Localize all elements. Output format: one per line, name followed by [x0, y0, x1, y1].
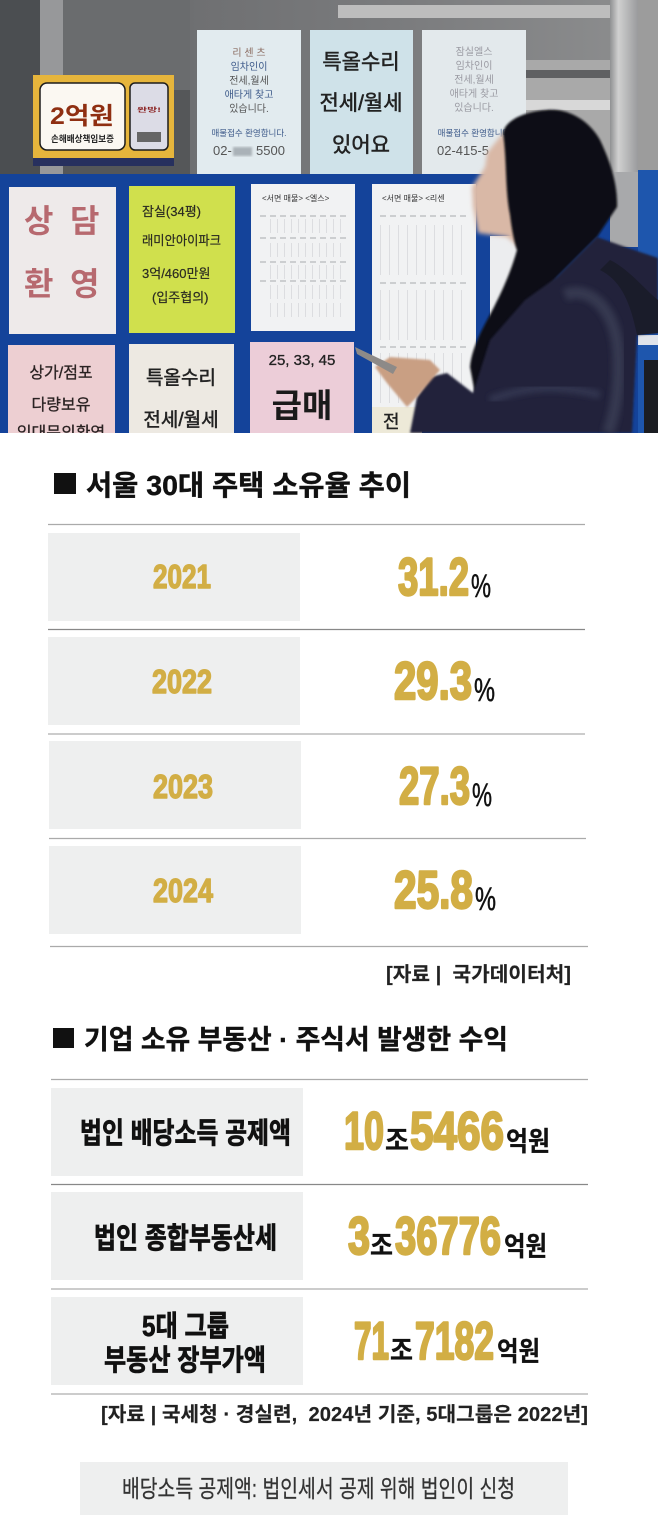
row: 2023: % — [472, 777, 492, 813]
poster: 특올수리 전세/월세 있어요: 전세/월세 — [319, 92, 403, 115]
poster: 잠실엘스 notice: 매물접수 환영합니다 — [438, 128, 511, 138]
row: 2024: 25.8 — [394, 861, 473, 920]
woman figure — [355, 110, 658, 433]
poster: 잠실 listing: 잠실(34평) — [142, 204, 201, 219]
table: Seoul 30s home ownership — [48, 524, 588, 946]
poster: 상가/점포: 임대문의환영 — [17, 424, 105, 442]
source: 국가데이터처: [자료 | 국가데이터처] — [386, 963, 571, 986]
row: 2021 — [48, 533, 491, 621]
hair — [470, 110, 617, 420]
sign: 2억원 guarantee card: 2억원 — [50, 103, 114, 130]
row: 법인 배당소득 공제액 — [51, 1088, 550, 1176]
poster: 리센츠 notice: 02- — [213, 143, 232, 158]
row: 2022: 29.3 — [394, 652, 472, 711]
poster: 잠실엘스 notice: 임차인이 — [456, 59, 492, 72]
sign: 2억원 guarantee card — [33, 75, 174, 166]
poster: 상담 환영 — [9, 187, 116, 334]
poster: 잠실엘스 notice — [422, 30, 526, 174]
row: 2021: % — [471, 568, 491, 604]
row: 5대 그룹 부동산 장부가액: 조 — [390, 1336, 413, 1366]
poster: 리센츠 notice: 리 센 츠 — [232, 47, 266, 59]
sign: 2억원 guarantee card: 손해배상책임보증 — [51, 133, 114, 144]
poster: 잠실엘스 notice: 전세,월세 — [454, 74, 494, 86]
poster: 잠실 listing: 래미안아이파크 — [142, 233, 221, 248]
poster: 리센츠 notice: 임차인이 — [231, 60, 267, 73]
row: 법인 배당소득 공제액: 5466 — [410, 1102, 504, 1161]
row: 법인 종합부동산세: 법인 종합부동산세 — [94, 1222, 277, 1255]
footnote box — [80, 1462, 568, 1515]
row: 2021: 2021 — [153, 558, 211, 595]
poster: 리센츠 notice: 있습니다. — [229, 103, 269, 115]
row: 법인 종합부동산세: 억원 — [504, 1232, 547, 1262]
poster: 특올수리 전세/월세 있어요 — [310, 30, 413, 174]
jacket — [410, 237, 658, 433]
row: 2022 — [48, 637, 495, 725]
row: 법인 배당소득 공제액: 10 — [344, 1102, 384, 1161]
heading: 기업 소유 부동산·주식서 발생한 수익: 기업 소유 부동산 · 주식서 발생한 수익 — [84, 1025, 508, 1055]
photo: woman looking at real-estate office window — [0, 0, 658, 442]
row: 2024 — [49, 846, 496, 934]
row: 법인 종합부동산세: 조 — [370, 1231, 393, 1261]
poster: 특올수리 전세/월세: 특올수리 — [146, 367, 216, 389]
row: 법인 배당소득 공제액: 억원 — [506, 1127, 550, 1157]
table: corporate real estate and stock gains — [51, 1080, 588, 1394]
poster: price table 2 — [372, 184, 476, 433]
poster: 잠실엘스 notice: 있습니다. — [454, 102, 494, 114]
row: 법인 종합부동산세: 36776 — [395, 1207, 501, 1266]
row: 2022: 2022 — [152, 663, 212, 700]
poster: 상가/점포: 다량보유 — [32, 396, 90, 414]
row: 5대 그룹 부동산 장부가액: 억원 — [497, 1337, 540, 1367]
poster: 리센츠 notice: 5500 — [256, 143, 285, 158]
poster: 리센츠 notice: 전세,월세 — [229, 75, 269, 87]
poster: 특올수리 전세/월세 있어요: 있어요 — [332, 134, 390, 157]
poster: 리센츠 notice — [197, 30, 301, 174]
row: 5대 그룹 부동산 장부가액 — [51, 1297, 540, 1385]
poster: 잠실엘스 notice: 02-415-5 — [437, 143, 489, 158]
poster: 잠실 listing: 3억/460만원 — [142, 266, 210, 281]
row: 법인 종합부동산세 — [51, 1192, 547, 1280]
poster: 상담 환영: 담 — [70, 203, 99, 239]
footnote box: 배당소득 공제액: 법인세서 공제 위해 법인이 신청 — [122, 1476, 515, 1503]
row: 2023: 27.3 — [399, 757, 470, 816]
phone — [355, 347, 397, 374]
row: 2024: % — [475, 881, 496, 917]
row: 5대 그룹 부동산 장부가액: 7182 — [415, 1312, 494, 1371]
poster: price table 1 — [251, 184, 355, 331]
row: 법인 종합부동산세: 3 — [348, 1207, 370, 1266]
hand — [375, 357, 440, 407]
row: 2023: 2023 — [153, 768, 213, 805]
poster: 잠실 listing: (입주협의) — [152, 290, 208, 305]
row: 5대 그룹 부동산 장부가액: 5대 그룹 — [142, 1310, 229, 1343]
poster: 잠실엘스 notice: 잠실엘스 — [456, 45, 492, 58]
poster: 급매: 급매 — [272, 387, 332, 424]
poster: 상담 환영: 영 — [70, 266, 99, 302]
sign: 2억원 guarantee card: 완방! — [137, 106, 161, 114]
row: 2021: 31.2 — [398, 548, 469, 607]
poster: 잠실 listing — [129, 186, 235, 333]
face — [470, 132, 516, 247]
poster: 리센츠 notice: 애타게 찾고 — [225, 89, 273, 101]
poster: 상가/점포 — [8, 345, 115, 442]
poster: 특올수리 전세/월세 — [129, 344, 234, 433]
row: 법인 배당소득 공제액: 법인 배당소득 공제액 — [80, 1117, 291, 1150]
poster: price table 2: 전 — [383, 412, 400, 432]
poster: 특올수리 전세/월세 있어요: 특올수리 — [322, 51, 400, 74]
poster: price table 1: <서면 매물> <엘스> — [262, 193, 330, 203]
row: 2024: 2024 — [153, 872, 214, 909]
heading: 서울 30대 주택 소유율 추이: 서울 30대 주택 소유율 추이 — [86, 470, 411, 501]
source: 국세청 경실련: [자료 | 국세청 · 경실련, 2024년 기준, 5대그룹은 2022년] — [101, 1403, 588, 1426]
row: 2023 — [49, 741, 492, 829]
row: 5대 그룹 부동산 장부가액: 71 — [354, 1312, 389, 1371]
blue board — [0, 174, 640, 433]
poster: price table 2: <서면 매물> <리센 — [382, 193, 445, 203]
poster: 급매 — [250, 342, 354, 433]
poster: 잠실엘스 notice: 애타게 찾고 — [450, 88, 498, 100]
poster: 급매: 25, 33, 45 — [269, 352, 335, 369]
poster: 리센츠 notice: 매물접수 환영합니다. — [211, 128, 287, 138]
row: 5대 그룹 부동산 장부가액: 부동산 장부가액 — [104, 1344, 266, 1377]
row: 2022: % — [474, 672, 495, 708]
poster: 특올수리 전세/월세: 전세/월세 — [143, 409, 219, 431]
poster: 상담 환영: 상 — [24, 203, 53, 239]
poster: 상가/점포: 상가/점포 — [29, 364, 93, 382]
poster: 상담 환영: 환 — [24, 266, 53, 302]
row: 법인 배당소득 공제액: 조 — [385, 1126, 409, 1156]
